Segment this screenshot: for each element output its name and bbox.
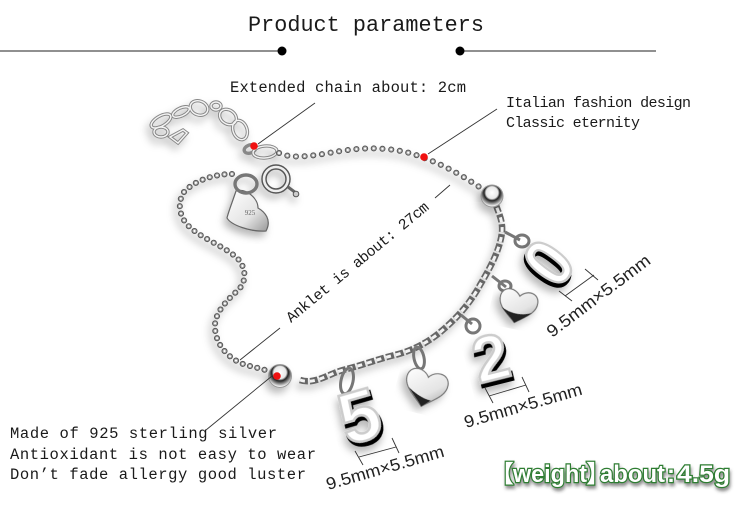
cable chain (300, 205, 502, 381)
extension chain links (149, 98, 277, 159)
weight label: 4.5g (677, 461, 730, 488)
charm links (338, 232, 529, 395)
callout: material: Don’t fade allergy good luster (10, 466, 306, 484)
callout: material (10, 372, 316, 484)
weight label: : (667, 461, 675, 488)
weight label: about (600, 461, 665, 488)
weight label: 【 (490, 461, 514, 488)
weight label: 】 (586, 461, 610, 488)
header rule: left with dot (0, 46, 286, 56)
charm: heart right (496, 287, 540, 327)
callout: anklet length: Anklet is about: 27cm (283, 199, 433, 327)
stopper beads (268, 185, 503, 388)
tag engraving: 925 (245, 209, 256, 217)
charm: heart left (401, 366, 450, 411)
callout: design (420, 95, 691, 161)
charm: digit 2: 2 (465, 319, 517, 397)
lower bead chain (180, 174, 268, 371)
callout: extended chain: Extended chain about: 2cm (230, 79, 466, 97)
callout: material: Made of 925 sterling silver (10, 425, 277, 443)
charm: digit 5: 5 (329, 373, 390, 461)
callout: extended chain (230, 79, 466, 150)
weight label (490, 461, 730, 488)
callout: material: Antioxidant is not easy to wear (10, 446, 316, 464)
header rule: right with dot (456, 46, 656, 56)
anklet product illustration (149, 98, 590, 465)
charm: digit 0: 0 (506, 230, 589, 303)
dimension: charm 2: 9.5mm×5.5mm (462, 380, 584, 432)
dimension: charm 0: 9.5mm×5.5mm (543, 251, 654, 341)
upper bead chain (279, 148, 488, 193)
weight label: weight (512, 461, 587, 488)
charm: digit 5: 5 (332, 377, 392, 465)
callout: anklet length (240, 185, 450, 360)
charm: digit 2: 2 (467, 322, 519, 401)
callout: design: Italian fashion design (506, 95, 691, 112)
callout: design: Classic eternity (506, 115, 640, 132)
title: Product parameters (248, 13, 484, 38)
dimension: charm 5: 9.5mm×5.5mm (324, 442, 446, 494)
charm: digit 0: 0 (507, 226, 590, 299)
spring clasp and heart tag (227, 167, 299, 231)
